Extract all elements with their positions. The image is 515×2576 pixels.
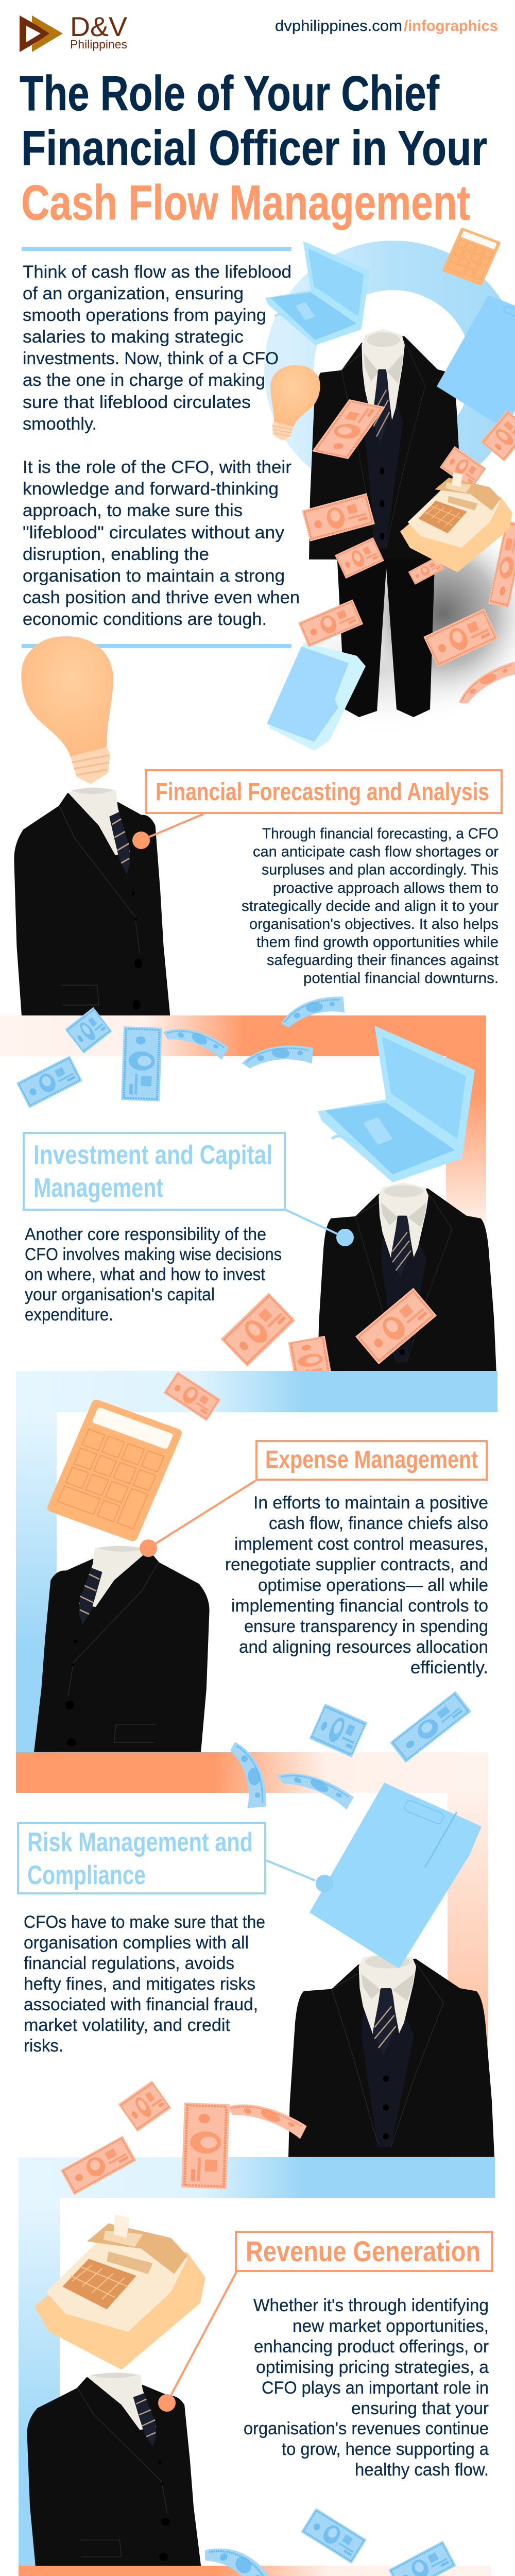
icon: light bulb xyxy=(270,365,320,440)
body text: cash flow, finance chiefs also xyxy=(269,1514,488,1533)
header logo xyxy=(20,12,128,52)
icon: briefcase xyxy=(318,1026,475,1182)
icon: briefcase xyxy=(265,241,370,345)
heading xyxy=(256,1441,487,1480)
suit xyxy=(288,1952,494,2157)
header url: /infographics xyxy=(404,18,498,35)
connector xyxy=(132,814,203,849)
heading xyxy=(18,1823,265,1893)
body text: efficiently. xyxy=(410,1658,488,1677)
divider bottom xyxy=(22,644,291,648)
body text: organisation's revenues continue xyxy=(244,2419,489,2438)
suit xyxy=(318,1182,496,1371)
body text: them find growth opportunities while xyxy=(256,934,499,951)
body text: ensure transparency in spending xyxy=(244,1617,488,1636)
body text: can anticipate cash flow shortages or xyxy=(253,844,499,860)
intro text block: disruption, enabling the xyxy=(23,545,209,564)
suit trousers xyxy=(332,546,435,717)
panel: risk management and compliance xyxy=(16,1691,494,2157)
intro text block: sure that lifeblood circulates xyxy=(23,393,251,412)
body text xyxy=(25,1225,282,1325)
icon: light bulb xyxy=(21,636,113,784)
icon: lower folder xyxy=(267,642,366,751)
frame band xyxy=(16,1752,488,2157)
body text: and aligning resources allocation xyxy=(239,1637,488,1657)
panel: expense management xyxy=(16,1371,497,1752)
suit xyxy=(14,787,170,1015)
frame band xyxy=(19,2157,495,2566)
body text: your organisation's capital xyxy=(25,1285,215,1304)
body text: on where, what and how to invest xyxy=(25,1265,266,1284)
intro text block: smooth operations from paying xyxy=(23,306,266,325)
intro text block xyxy=(23,262,300,629)
intro text block: economic conditions are tough. xyxy=(23,609,267,629)
body text: safeguarding their finances against xyxy=(267,952,499,969)
suit jacket xyxy=(309,329,464,560)
title xyxy=(20,66,487,230)
suit xyxy=(34,1546,210,1752)
heading: Investment and Capital xyxy=(33,1140,272,1170)
intro text block: of an organization, ensuring xyxy=(23,284,244,303)
intro text block: approach, to make sure this xyxy=(23,501,243,520)
body text: strategically decide and align it to your xyxy=(242,898,499,914)
intro text block: salaries to making strategic xyxy=(23,327,244,347)
intro text block: organisation to maintain a strong xyxy=(23,566,285,586)
intro text block: Think of cash flow as the lifeblood xyxy=(23,262,291,282)
body text: organisation complies with all xyxy=(24,1933,249,1953)
icon: cash register xyxy=(35,2214,205,2370)
body text: renegotiate supplier contracts, and xyxy=(225,1555,488,1574)
floor shadow xyxy=(258,515,515,737)
body text xyxy=(24,1912,265,2056)
blue ring xyxy=(289,265,497,473)
falling bills xyxy=(16,996,346,1108)
body text: financial regulations, avoids xyxy=(24,1954,234,1973)
body text: Another core responsibility of the xyxy=(25,1225,266,1244)
heading xyxy=(24,1133,285,1210)
frame band xyxy=(0,1015,486,1247)
body text: organisation's objectives. It also helps xyxy=(249,916,499,933)
icon: cash register xyxy=(400,472,512,572)
frame band xyxy=(19,2566,491,2576)
icon: calculator xyxy=(46,1398,183,1543)
body text xyxy=(244,2296,489,2480)
intro text block: as the one in charge of making xyxy=(23,370,265,390)
body text xyxy=(242,825,499,987)
falling bills xyxy=(200,2508,456,2576)
body text: ensuring that your xyxy=(351,2399,489,2418)
heading: Risk Management and xyxy=(27,1827,253,1857)
body text: proactive approach allows them to xyxy=(273,880,499,896)
body text: enhancing product offerings, or xyxy=(254,2337,489,2357)
body text: expenditure. xyxy=(25,1305,113,1325)
connector xyxy=(140,1481,255,1557)
body text: CFO involves making wise decisions xyxy=(25,1245,282,1264)
body text: healthy cash flow. xyxy=(355,2460,489,2480)
panel: financial forecasting xyxy=(14,636,502,1015)
body text xyxy=(225,1493,488,1677)
heading xyxy=(146,770,502,813)
intro text block: cash position and thrive even when xyxy=(23,588,300,607)
body text: Through financial forecasting, a CFO xyxy=(262,825,499,842)
divider top xyxy=(22,247,291,251)
connector xyxy=(284,1209,354,1246)
header url: dvphilippines.com xyxy=(275,18,402,35)
falling bills xyxy=(220,1288,437,1388)
intro text block: It is the role of the CFO, with their xyxy=(23,457,291,477)
body text: risks. xyxy=(24,2036,63,2056)
panel: revenue generation xyxy=(19,2080,495,2566)
connector xyxy=(158,2272,236,2412)
body text: CFOs have to make sure that the xyxy=(24,1912,265,1932)
body text: CFO plays an important role in xyxy=(262,2378,489,2398)
heading: Management xyxy=(33,1173,163,1203)
header logo: D&V xyxy=(70,12,128,42)
body text: new market opportunities, xyxy=(293,2316,489,2336)
header logo: Philippines xyxy=(70,38,127,51)
body text: to grow, hence supporting a xyxy=(282,2439,489,2459)
intro text block: investments. Now, think of a CFO xyxy=(23,349,279,368)
body text: potential financial downturns. xyxy=(303,970,499,987)
body text: Whether it's through identifying xyxy=(253,2296,489,2315)
falling bills xyxy=(298,399,515,706)
panel: hero illustration xyxy=(258,227,515,751)
falling bills xyxy=(230,1691,471,1818)
body text: optimising pricing strategies, a xyxy=(256,2358,489,2377)
icon: folder xyxy=(437,295,515,427)
panel: building and maintaining investor relations xyxy=(9,2508,503,2576)
body text: implement cost control measures, xyxy=(234,1534,488,1554)
body text: associated with financial fraud, xyxy=(24,1995,258,2014)
suit xyxy=(27,2372,201,2566)
falling bill xyxy=(163,1371,221,1421)
panel: investment and capital management xyxy=(0,996,496,1388)
intro text block: smoothly. xyxy=(23,414,97,434)
body text: implementing financial controls to xyxy=(231,1596,488,1616)
header url xyxy=(275,18,498,35)
body text: optimise operations— all while xyxy=(258,1575,488,1595)
falling bills xyxy=(60,2080,307,2195)
icon: calculator xyxy=(442,227,501,286)
heading: Compliance xyxy=(27,1860,146,1890)
body text: market volatility, and credit xyxy=(24,2015,231,2035)
icon: clipboard xyxy=(310,1783,482,1969)
connector xyxy=(266,1860,333,1892)
intro text block: "lifeblood" circulates without any xyxy=(23,523,284,543)
body text: hefty fines, and mitigates risks xyxy=(24,1974,255,1994)
frame band xyxy=(16,1371,497,1752)
body text: In efforts to maintain a positive xyxy=(253,1493,488,1513)
body text: surpluses and plan accordingly. This xyxy=(262,861,499,878)
intro text block: knowledge and forward-thinking xyxy=(23,479,279,499)
